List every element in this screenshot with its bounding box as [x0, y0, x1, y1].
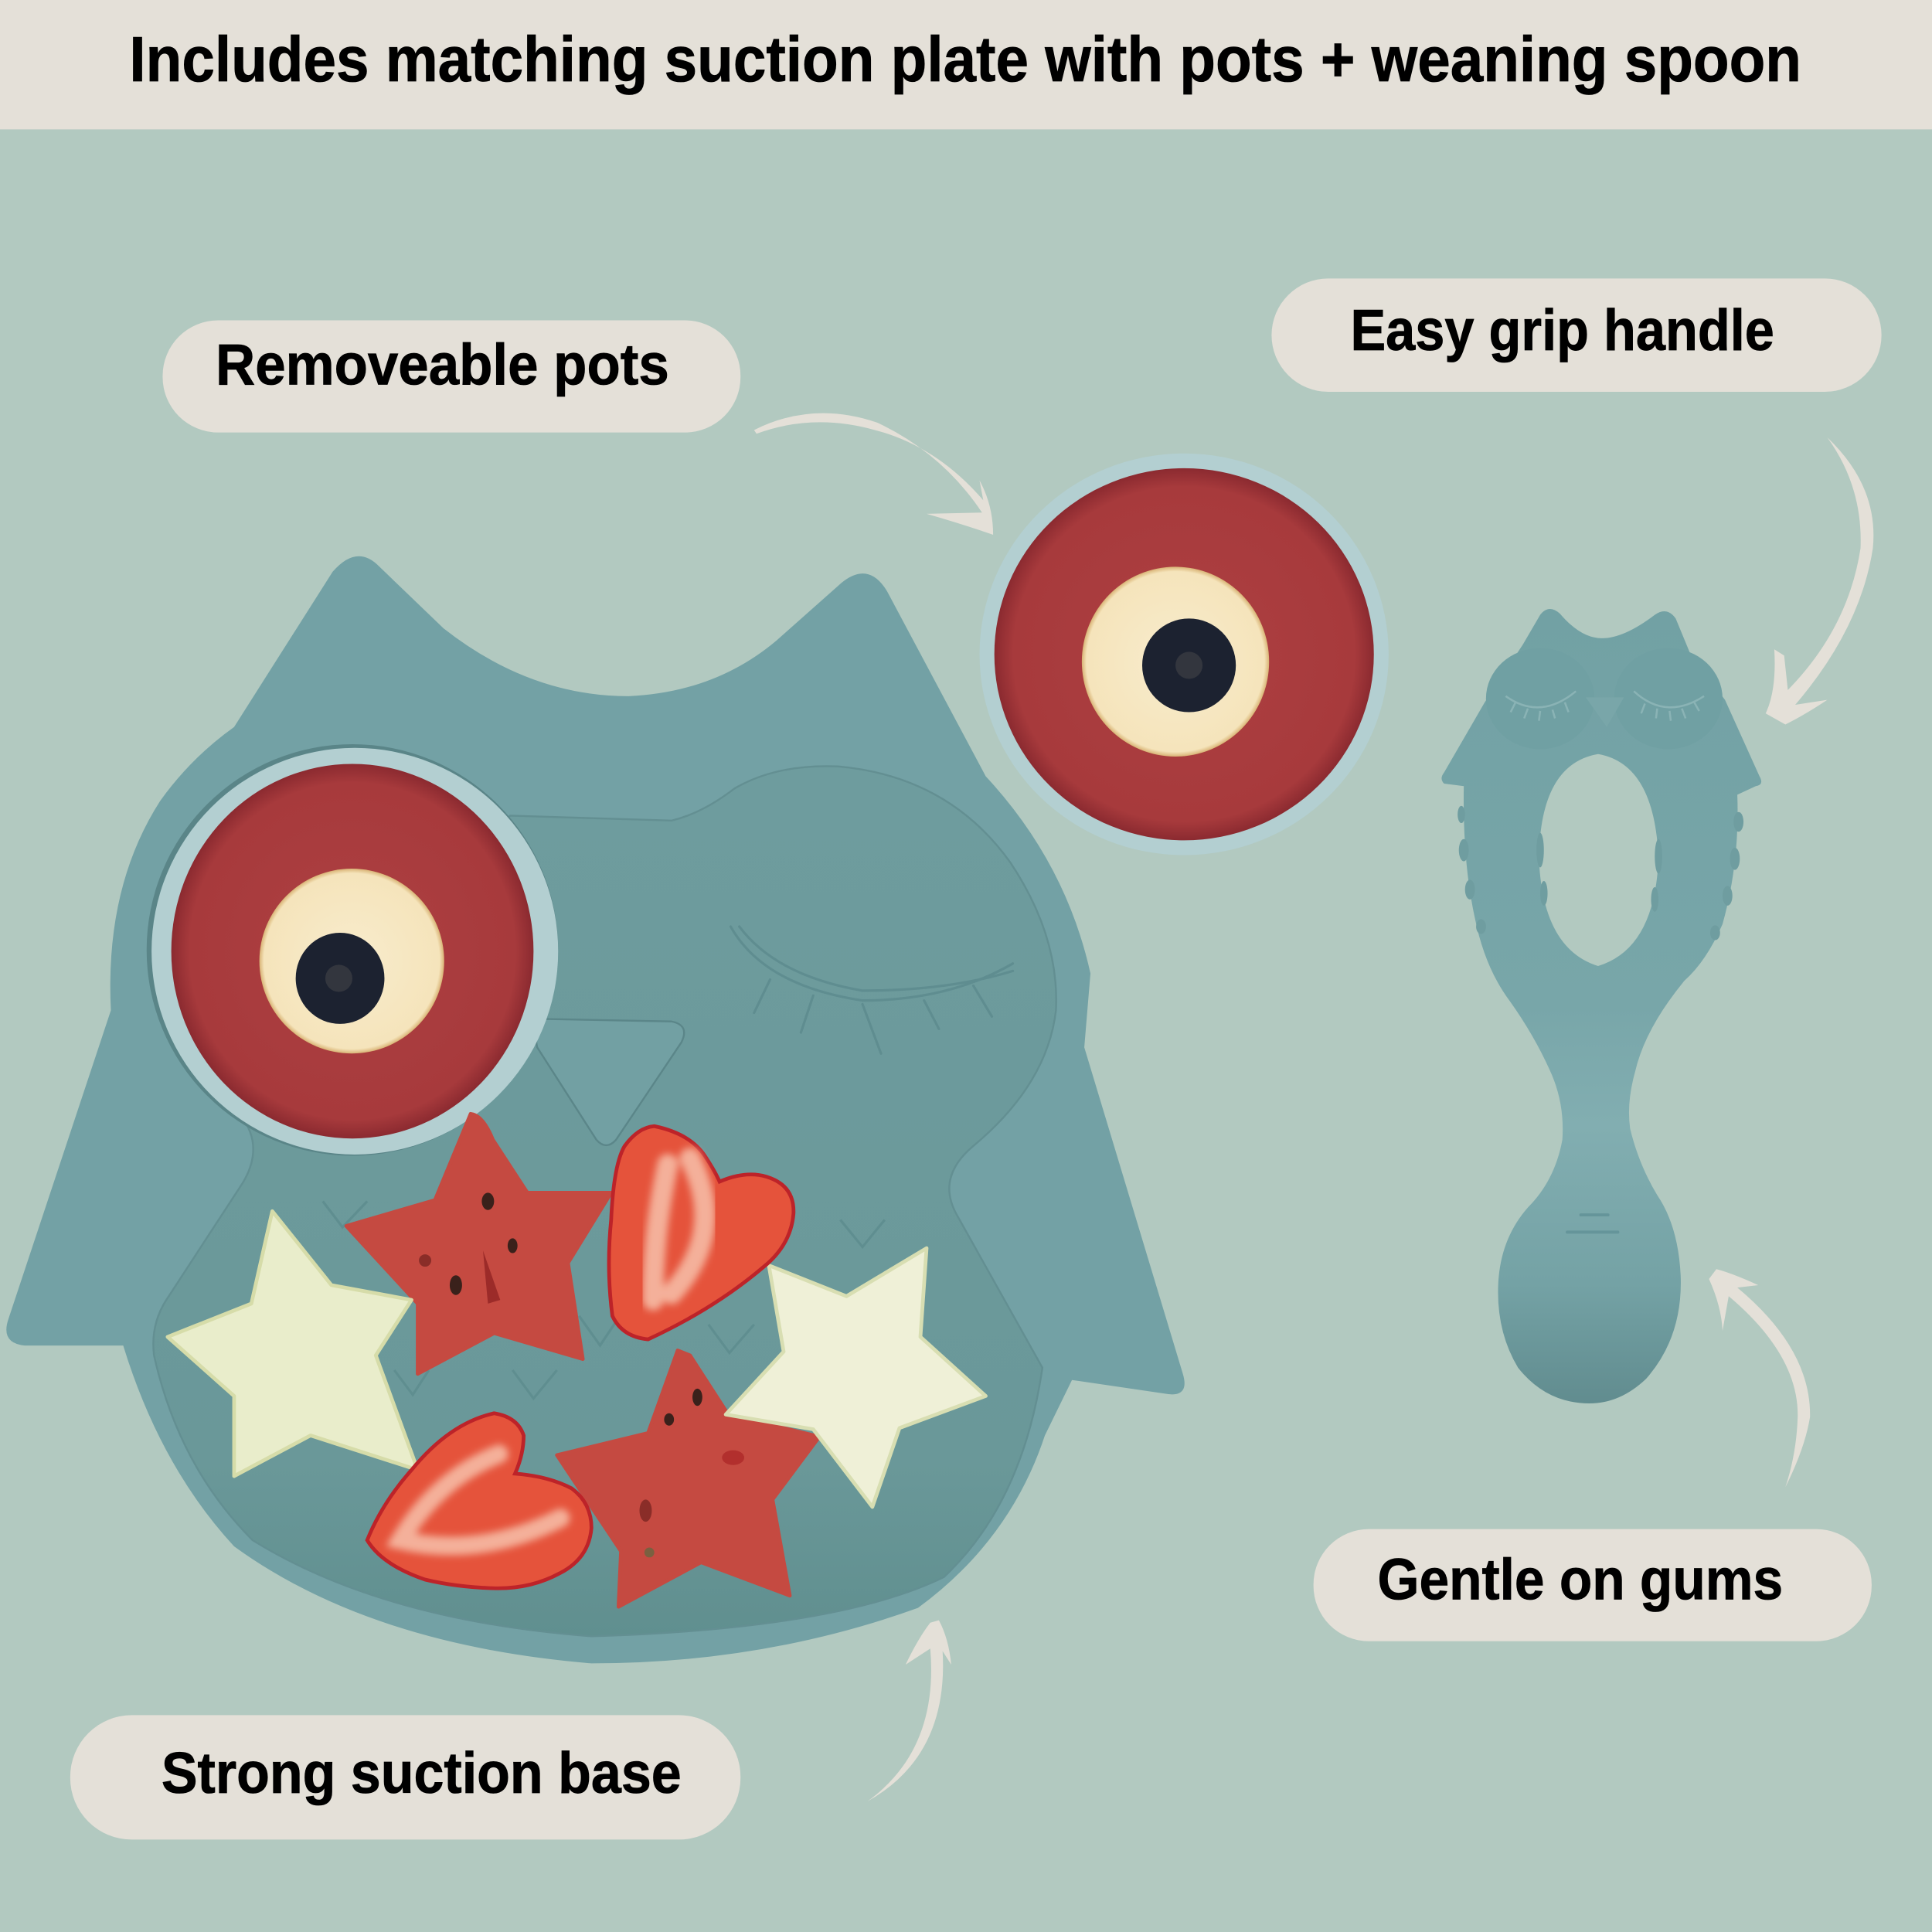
loose pot — [980, 454, 1389, 855]
title banner — [0, 0, 1932, 129]
spoon bowl marks — [1567, 1215, 1617, 1232]
pill: removeable pots: Removeable pots — [216, 332, 669, 396]
apple star 2 — [726, 1248, 986, 1507]
apple star 1 — [168, 1211, 417, 1476]
spoon bumps — [1458, 806, 1743, 940]
watermelon star 2 — [557, 1350, 819, 1607]
closed eye lash emboss — [730, 927, 1013, 1053]
owl plate — [6, 556, 1185, 1663]
plate emboss chevrons — [323, 1202, 885, 1399]
pill: strong suction base — [70, 1715, 740, 1839]
owl spoon — [1441, 609, 1761, 1403]
spoon eyelashes — [1505, 691, 1704, 721]
pill: gentle on gums — [1314, 1529, 1872, 1641]
arrow: to suction base — [867, 1621, 951, 1801]
pill: gentle on gums: Gentle on gums — [1378, 1547, 1783, 1612]
strawberry 2 flesh — [400, 1454, 560, 1546]
watermelon star 1 — [346, 1114, 611, 1374]
pill: easy grip handle — [1271, 278, 1882, 392]
pill: easy grip handle: Easy grip handle — [1350, 298, 1774, 362]
arrow: to handle — [1766, 437, 1873, 725]
strawberry heart 1 — [609, 1126, 794, 1339]
plate food well — [153, 766, 1056, 1636]
pill: strong suction base: Strong suction base — [162, 1740, 682, 1805]
pill: removeable pots — [162, 321, 740, 433]
plate beak — [536, 1019, 684, 1145]
arrow: to pot — [754, 413, 993, 535]
spoon eyes and beak — [1486, 648, 1723, 749]
pot in plate — [147, 744, 558, 1156]
strawberry 1 flesh — [653, 1158, 705, 1300]
arrow: to spoon bowl — [1709, 1269, 1810, 1487]
melon seeds 1 — [419, 1192, 518, 1304]
melon seeds 2 — [639, 1389, 744, 1557]
strawberry heart 2 — [367, 1413, 591, 1588]
title banner: Includes matching suction plate with pots + weaning spoon — [129, 23, 1801, 95]
